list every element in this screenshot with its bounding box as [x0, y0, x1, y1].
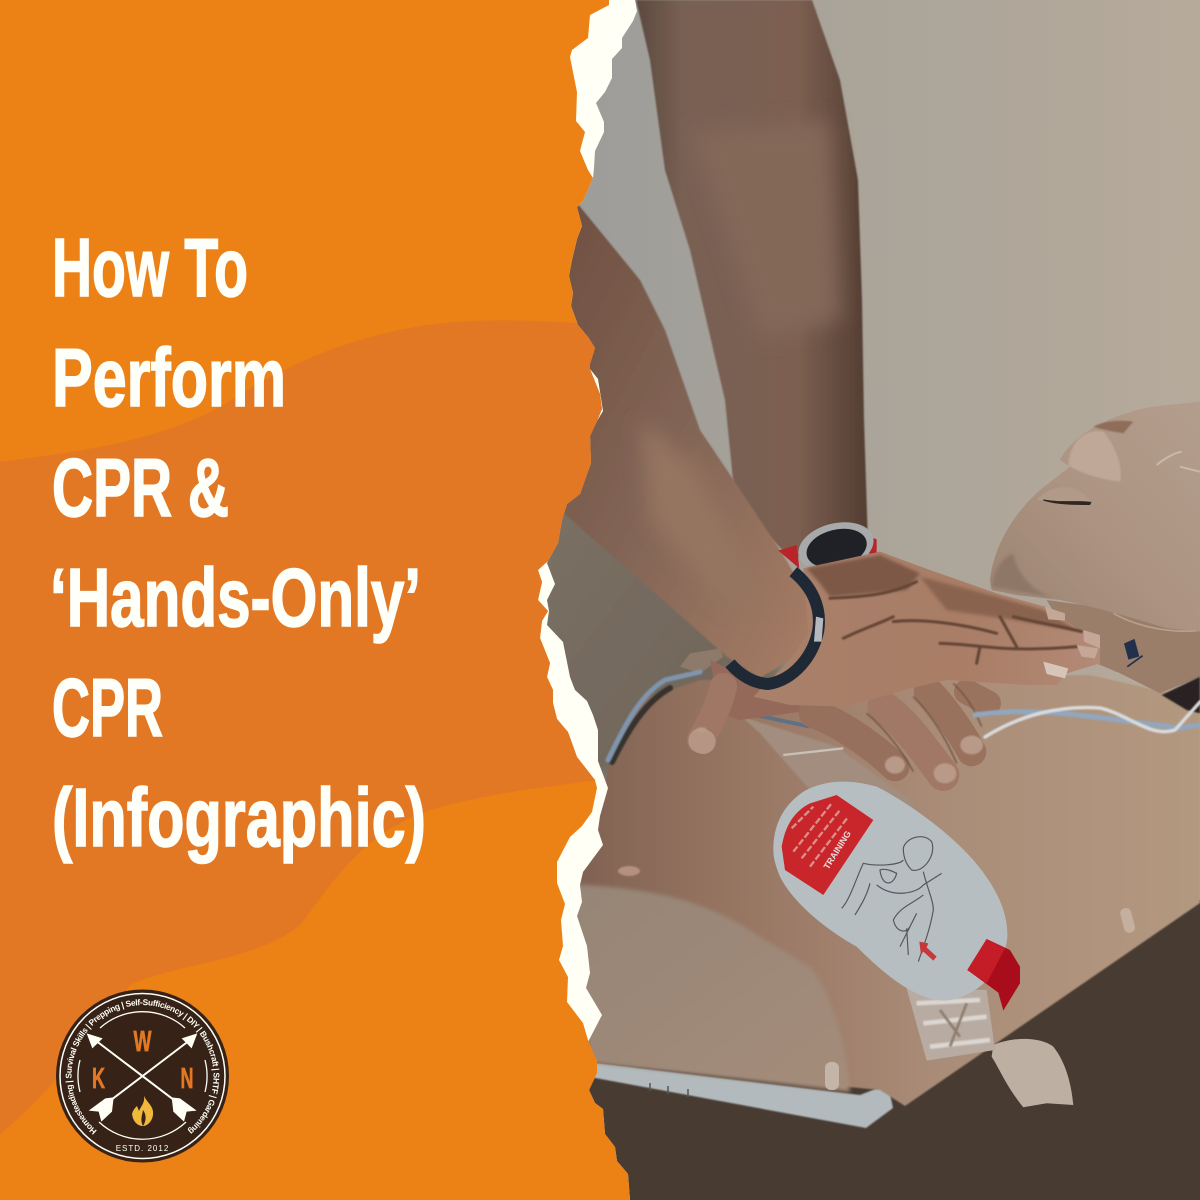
- finger three: [928, 692, 972, 752]
- upper finger shading: [920, 577, 1080, 632]
- top hand: [753, 552, 1100, 707]
- back of hand: [753, 552, 1100, 707]
- inner ring arcs: [78, 1012, 207, 1139]
- arrow feathers: [89, 1097, 197, 1122]
- title: How To: [52, 221, 248, 314]
- forearm highlight: [640, 420, 770, 620]
- manikin torso top surface: [570, 675, 1200, 1106]
- panel: orange title area: [0, 0, 660, 1200]
- neck logo: [1125, 640, 1143, 667]
- foil highlights: [917, 1000, 990, 1047]
- label text: TRAINING: [822, 829, 853, 871]
- eye: [1157, 452, 1200, 472]
- darker wave shape: [0, 320, 610, 1135]
- manikin head: [990, 402, 1200, 713]
- red warning label: [782, 795, 873, 895]
- finger four: [967, 692, 988, 703]
- veins and creases: [830, 582, 1082, 663]
- finger two: [883, 707, 943, 775]
- forehead shadow: [1093, 421, 1133, 433]
- wires across chest: [608, 672, 1200, 762]
- wristband: [730, 572, 823, 684]
- arrow heads: [87, 1033, 197, 1048]
- compass letters: W: [134, 1026, 152, 1058]
- fingernails: [696, 727, 983, 783]
- crossed arrows: [87, 1033, 197, 1122]
- title: Perform: [52, 331, 286, 424]
- logo badge: [56, 990, 229, 1162]
- upper arm shading: [690, 120, 840, 340]
- icon: flame: [132, 1096, 153, 1126]
- badge disc: [56, 990, 229, 1162]
- photo: lower wall shadow: [530, 470, 790, 800]
- wire to the left: [740, 712, 810, 727]
- manikin details: moulded holes: [618, 866, 1136, 1097]
- title: [50, 221, 426, 864]
- foil backing lower: [992, 1039, 1073, 1107]
- lips: [1037, 487, 1092, 503]
- arrow one shaft: [95, 1040, 190, 1103]
- ring text: Homesteading | Survival Skills | Prepping | Self-Sufficiency | DIY | Bushcraft | SHTF | Gardening: [66, 999, 220, 1135]
- fingernails: [1043, 607, 1100, 678]
- palm under: [710, 660, 813, 720]
- lower hand and foil: [680, 648, 988, 807]
- manikin torso front face: [570, 884, 850, 1092]
- compass letters: [92, 1026, 194, 1095]
- title: (Infographic): [52, 771, 426, 864]
- watch: [778, 515, 879, 579]
- foil top: [680, 648, 723, 673]
- shadow under neck: [1162, 677, 1200, 713]
- pad diagram: [842, 837, 942, 962]
- orange background: [0, 0, 660, 1200]
- photo: wall background: [530, 0, 1200, 1200]
- title: ‘Hands-Only’: [50, 551, 421, 644]
- collar line: [1113, 613, 1197, 631]
- label fine print: [792, 803, 848, 867]
- neck: [1047, 600, 1200, 693]
- lower forearm: [560, 203, 812, 678]
- title: CPR: [52, 661, 163, 754]
- AED training pad: [773, 782, 1073, 1107]
- photo: floor: [580, 900, 1200, 1200]
- chin shadow: [992, 553, 1057, 598]
- pad body: [773, 782, 1007, 1001]
- pad red arrow: [919, 942, 937, 961]
- knuckle shading: [807, 555, 920, 597]
- finger one: [813, 713, 895, 767]
- photo: CPR training scene: [530, 0, 1200, 1200]
- mouth: [1043, 499, 1092, 505]
- torn paper edge: [0, 0, 637, 1200]
- established date: ESTD. 2012: [116, 1144, 169, 1153]
- thumb: [701, 687, 723, 740]
- face: [990, 402, 1200, 632]
- nose: [1068, 431, 1121, 482]
- foil backing upper: [907, 988, 995, 1061]
- compass letters: K: [92, 1063, 105, 1095]
- upper arm: [636, 0, 868, 558]
- foil strip: [742, 717, 920, 807]
- outer ring: [60, 994, 225, 1158]
- finger gaps: [867, 683, 982, 772]
- title: CPR &: [52, 441, 229, 534]
- red pull tab: [967, 939, 1020, 1011]
- photo: manikin base plate: [590, 1062, 893, 1128]
- compass letters: N: [180, 1063, 194, 1095]
